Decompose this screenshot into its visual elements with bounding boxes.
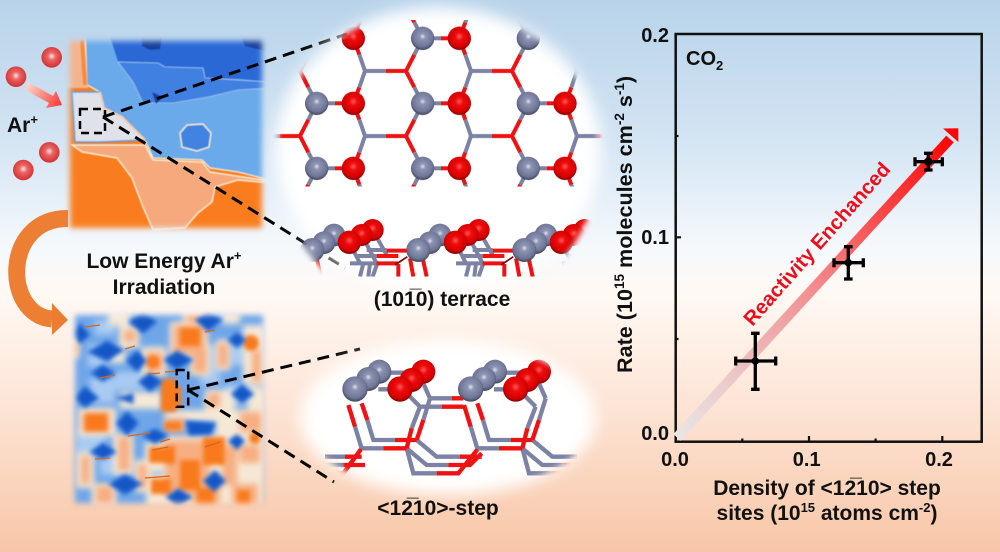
label: terrace: (101̅0) terrace (374, 288, 510, 311)
dashed box: terrace selection (80, 109, 105, 133)
x tick labels: 0.1 (793, 449, 821, 471)
x tick labels (661, 449, 953, 471)
arrow: curved process arrow (17, 218, 68, 335)
region: navy patches (142, 36, 270, 104)
region: light blue terrace (85, 30, 270, 180)
diagram: step side view atoms (325, 360, 597, 473)
label: low energy irradiation: + (234, 248, 242, 263)
icon: argon ion spheres (6, 47, 62, 180)
layer: bright orange patches (85, 328, 261, 508)
data point 1 (736, 333, 776, 389)
y axis title: -2 (612, 113, 627, 125)
arrow: reactivity trend (677, 128, 958, 438)
layer: cream patches (70, 310, 266, 508)
label: irradiation: Irradiation (113, 276, 215, 299)
y axis title: ) (612, 76, 637, 83)
diagram: terrace top view atoms (274, 20, 603, 186)
panel: step view ellipse (300, 341, 596, 495)
chart frame (676, 34, 982, 442)
label: step: <12̅10>-step (377, 497, 499, 520)
y axis title: 15 (612, 273, 627, 289)
y axis title: Rate (10 (612, 289, 637, 373)
label: Ar+: + (30, 112, 38, 127)
y tick labels (641, 25, 669, 445)
axis ticks (676, 136, 942, 442)
y tick labels: 0.1 (641, 227, 669, 249)
y axis title: s (612, 95, 637, 113)
region: grey terrace (72, 92, 145, 142)
y axis title: molecules cm (612, 125, 637, 274)
dashed box: step selection (177, 370, 188, 407)
region: dark blue terrace (111, 38, 265, 82)
y axis title: -1 (612, 83, 627, 95)
region: mid blue terrace (118, 62, 270, 103)
marks: step edge lines (85, 325, 220, 478)
x axis title line two: ) (930, 502, 937, 525)
layer: light blue patches (76, 320, 262, 482)
label: Ar+: Ar (7, 114, 30, 137)
mark: orange edge (82, 40, 85, 85)
data point 3 (915, 153, 942, 170)
x axis title line two: -2 (919, 500, 930, 515)
y tick labels: 0.2 (641, 25, 669, 47)
panel: irradiated surface microscopy image (70, 310, 268, 508)
label: CO2: 2 (716, 58, 723, 73)
x axis title line two: sites (10 (717, 502, 801, 525)
panel: pristine surface microscopy image (60, 30, 270, 240)
mark: cream edge of grey terrace (100, 92, 145, 140)
label: low energy irradiation: Low Energy Ar (86, 250, 234, 273)
arrow: ion beam (25, 82, 62, 108)
x tick labels: 0.0 (661, 449, 689, 471)
x axis title line two: atoms cm (815, 502, 919, 525)
dashed line: step zoom upper (188, 349, 360, 390)
data point 2 (834, 247, 863, 279)
diagram: terrace side view atoms (300, 219, 592, 277)
x tick labels: 0.2 (925, 449, 953, 471)
label: CO2: CO (686, 48, 716, 70)
chart: rate vs step density (612, 25, 982, 525)
region: salmon strip (66, 37, 88, 89)
label: reactivity enhanced: Reactivity Enchanced (740, 159, 895, 330)
x axis title: Density of <12̅10> step (713, 477, 941, 500)
region: pale orange terrace (72, 145, 270, 230)
region: blue pit (180, 124, 211, 151)
panel: terrace top view ellipse (275, 7, 601, 293)
layer: pale orange patches (70, 312, 262, 508)
layer: dark blue hollows (74, 312, 252, 506)
dashed line: terrace zoom upper (103, 34, 347, 117)
dashed line: terrace zoom lower (103, 117, 345, 268)
dashed line: step zoom lower (188, 390, 334, 482)
y tick labels: 0.0 (641, 423, 669, 445)
x axis title line two: 15 (801, 500, 815, 515)
